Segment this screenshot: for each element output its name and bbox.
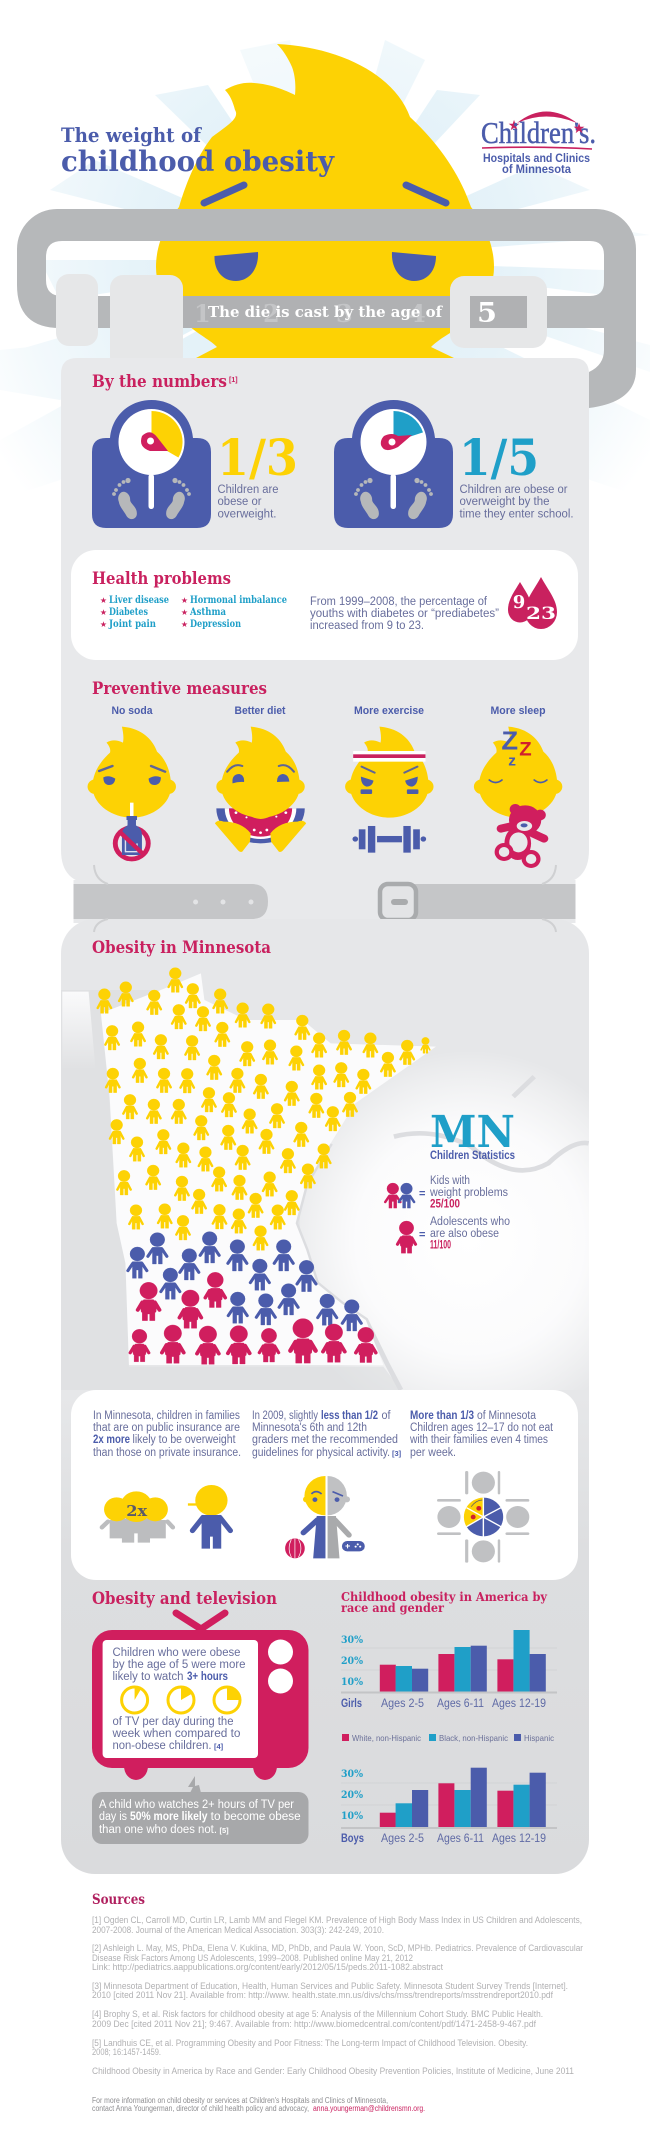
icon: dumbbell (352, 826, 426, 853)
fact 3: of Minnesota (477, 1410, 537, 1422)
face: more sleep (474, 726, 562, 818)
belt (17, 209, 636, 408)
panel: health problems (71, 550, 578, 660)
drops: 9 (513, 592, 525, 613)
icon: group of kids 2x: 2x (126, 1501, 148, 1520)
x labels: Ages 6-11 (437, 1833, 484, 1845)
state of Minnesota (101, 973, 436, 1365)
stat: weight problems (429, 1175, 508, 1210)
stat 1/5 caption: Children are obese or (460, 484, 568, 496)
x labels: Boys (341, 1833, 364, 1845)
heading: obesity in minnesota: Obesity in Minnesota (92, 938, 271, 958)
belt buckle (450, 276, 547, 348)
face: no soda (88, 727, 176, 861)
callout: 2+ hours: day is (99, 1811, 127, 1823)
icon: group of kids 2x (102, 1491, 173, 1543)
contact note: anna.youngerman@childrensmn.org. (313, 2104, 425, 2113)
chart legend (342, 1733, 555, 1743)
y labels: 20% (341, 1656, 363, 1667)
stat 1/5 caption: overweight by the (460, 496, 550, 508)
panel background (61, 919, 589, 1874)
map of Minnesota (61, 973, 590, 1390)
reference list: 2008; 16:1457-1459. (92, 2047, 161, 2058)
list of problems: Joint pain (108, 619, 157, 630)
belt around head (17, 209, 636, 408)
clocks (122, 1687, 240, 1713)
stat: obese adolescents: are also obese (430, 1228, 499, 1240)
tv text top: likely to watch (112, 1671, 184, 1683)
face: more sleep: Z (501, 726, 518, 755)
belt buckle (380, 884, 416, 920)
heading: sources: Sources (92, 1892, 145, 1908)
faded counting numbers: 1 (194, 299, 211, 328)
heading: race and gender: Childhood obesity in America by (341, 1590, 548, 1604)
list of problems: Hormonal imbalance (190, 595, 287, 606)
fact 3: with their families even 4 times (409, 1434, 548, 1446)
icon: kid with cap (188, 1485, 230, 1549)
reference list: [2] Ashleigh L. May, MS, PhDa, Elena V. Kuklina, MD, PhDb, and Paula W. Yoon, ScD, MPHb. Pediatrics. Prevalence of Cardiovascular (92, 1943, 584, 1954)
list of problems (108, 595, 287, 630)
stat 1/3: 1/3 (217, 428, 298, 487)
logo arc (517, 112, 577, 123)
faded counting numbers (194, 299, 426, 328)
title line 2: childhood obesity (61, 145, 335, 178)
title line 1: The weight of (61, 123, 202, 147)
health card (71, 550, 578, 660)
chart legend: Black, non-Hispanic (439, 1733, 509, 1743)
logo stars: ★ (508, 117, 520, 133)
logo line (482, 147, 592, 149)
stat 1/3 caption: obese or (218, 496, 262, 508)
logo (481, 112, 596, 176)
panel: Minnesota facts (71, 1390, 578, 1580)
reference list: [1] Ogden CL, Carroll MD, Curtin LR, Lamb MM and Flegel KM. Prevalence of High Body Mass Index in US Children and Adolescents, (92, 1915, 582, 1926)
list stars: ★ (100, 608, 107, 617)
west white land (62, 992, 93, 1046)
y labels: 30% (341, 1769, 363, 1780)
screen (103, 1640, 258, 1758)
drops (508, 577, 557, 629)
stat: obese adolescents (430, 1216, 510, 1252)
callout: 2+ hours: to become obese (211, 1811, 301, 1823)
equals: = (419, 1188, 425, 1200)
panel background (61, 358, 589, 884)
stat 1/5: 1/5 (459, 428, 539, 487)
list stars (100, 596, 188, 629)
tv text bottom (111, 1716, 240, 1752)
fact 1: In Minnesota, children in families (93, 1410, 240, 1422)
y labels: 10% (341, 1811, 363, 1822)
diabetes statement: increased from 9 to 23. (310, 620, 424, 632)
bars (380, 1630, 546, 1692)
fact 2 (252, 1410, 402, 1459)
bars (380, 1768, 546, 1827)
reference list: [5] Landhuis CE, et al. Programming Obesity and Poor Fitness: The Long-term Impact of Childhood Television. Obesity. (92, 2038, 528, 2049)
belt holes (193, 900, 254, 904)
facts card (71, 1390, 578, 1580)
fact 3: Children ages 12–17 do not eat (410, 1422, 554, 1434)
bar chart: boys (341, 1768, 557, 1845)
fact 2: less than 1/2 (321, 1410, 378, 1422)
x labels (341, 1833, 546, 1845)
MN statistics (385, 1107, 515, 1253)
x labels: Ages 12-19 (492, 1698, 546, 1710)
scale icon 1/5 (334, 400, 453, 528)
diabetes statement: From 1999–2008, the percentage of (310, 596, 488, 608)
tv text bottom: [4] (214, 1742, 224, 1751)
people on the map (98, 968, 430, 1364)
number window (470, 296, 527, 328)
stat: obese adolescents: 11/100 (430, 1240, 451, 1252)
faded counting numbers: 4 (409, 299, 426, 328)
face: more sleep: Z (519, 739, 532, 760)
list stars: ★ (181, 620, 188, 629)
lake and river (296, 1077, 589, 1390)
stat: weight problems: Kids with (430, 1175, 470, 1187)
fact 3: per week. (410, 1447, 456, 1459)
icon: teddy bear (495, 804, 546, 868)
fact 1: 2x more (93, 1434, 130, 1446)
blue children (128, 1232, 361, 1331)
callout: 2+ hours: 50% more likely (130, 1811, 208, 1823)
bar chart: girls (341, 1630, 557, 1710)
map glow (306, 1076, 589, 1390)
labels: preventive measures: More sleep (490, 705, 546, 717)
list stars: ★ (181, 608, 188, 617)
face: more sleep: z (508, 753, 516, 770)
chart legend: White, non-Hispanic (352, 1733, 422, 1743)
contact note: For more information on child obesity or services at Children's Hospitals and Clinics of Minnesota, (92, 2096, 388, 2105)
labels: preventive measures: More exercise (354, 705, 424, 717)
preventive faces (88, 726, 562, 868)
reference list: [3] Minnesota Department of Education, Health, Human Services and Public Safety. Minnesota Student Survey Trends [Internet]. (92, 1981, 568, 1992)
logo subline 2: of Minnesota (502, 162, 571, 176)
fact 1: than those on private insurance. (93, 1447, 241, 1459)
list of problems: Depression (190, 619, 242, 630)
icon: family table (437, 1471, 529, 1563)
panel fold lines (94, 865, 556, 932)
waist backing (74, 880, 576, 923)
fact 3 (409, 1410, 554, 1459)
fact 1 (93, 1410, 241, 1459)
logo subline 1: Hospitals and Clinics (483, 151, 590, 165)
stat 1/3 caption: Children are (218, 484, 278, 496)
tv text bottom: of TV per day during the (112, 1716, 234, 1728)
character head (156, 44, 494, 358)
chart legend: Hispanic (524, 1733, 555, 1743)
fact 2: guidelines for physical activity. (252, 1447, 390, 1459)
list stars: ★ (100, 620, 107, 629)
background rays (0, 40, 650, 500)
stat 1/3 caption: overweight. (218, 508, 276, 520)
heading: preventive measures: Preventive measures (92, 679, 267, 699)
fact 3: More than 1/3 (410, 1410, 474, 1422)
reference list: Disease Risk Factors Among US Adolescents, 1999–2008. Published online May 21, 2012 (92, 1953, 413, 1964)
heading: race and gender (341, 1590, 548, 1615)
belt strap right (400, 884, 576, 919)
waist belt (74, 880, 576, 923)
list of problems: Liver disease (109, 595, 169, 606)
x labels: Ages 2-5 (381, 1833, 424, 1845)
panel: lower body (61, 919, 590, 1874)
crimson children (130, 1272, 376, 1364)
y labels (341, 1635, 363, 1688)
x labels (341, 1698, 546, 1710)
tv text bottom: non-obese children. (112, 1740, 212, 1752)
equals: = (419, 1229, 425, 1241)
reference list: Link: http://pediatrics.aappublications.org/content/early/2012/05/15/peds.2011-1082.abstract (92, 1962, 443, 1973)
tv text top: by the age of 5 were more (112, 1659, 246, 1671)
face: better diet (215, 727, 306, 852)
callout: 2+ hours: A child who watches 2+ hours of TV per (99, 1799, 294, 1811)
stat: obese adolescents: Adolescents who (430, 1216, 510, 1228)
belt loop middle (110, 275, 183, 370)
stat 1/5 caption: time they enter school. (460, 508, 574, 520)
cabinet (92, 1630, 308, 1768)
reference list: 2010 [cited 2011 Nov 21]. Available from: http://www. health.state.mn.us/divs/chs/mss/trendreports/msstrendreport2010.pdf (92, 1990, 553, 2001)
labels: preventive measures (112, 705, 546, 717)
y labels: 30% (341, 1635, 363, 1646)
fact 2: of (382, 1410, 391, 1422)
reference list (92, 1915, 584, 2077)
diabetes statement (310, 596, 499, 632)
fact 1: that are on public insurance are (93, 1422, 240, 1434)
faded counting numbers: 2 (263, 299, 280, 328)
belt strip over head (183, 296, 450, 328)
faded counting numbers: 3 (336, 299, 353, 328)
list of problems: Diabetes (109, 607, 148, 618)
logo star right: ★ (573, 120, 585, 136)
callout: 2+ hours: [5] (220, 1826, 229, 1835)
tv text top: Children who were obese (112, 1647, 240, 1659)
knobs (268, 1640, 293, 1694)
reference list: 2009 Dec [cited 2011 Nov 21]; 9:467. Available from: http://www.biomedcentral.com/content/pdf/1471-2458-9-467.pdf (92, 2019, 536, 2030)
drops: 23 (526, 604, 556, 624)
yellow children (98, 968, 430, 1250)
icon: half active kid (285, 1476, 365, 1558)
y labels: 10% (341, 1677, 363, 1688)
scale icon 1/3 (92, 400, 211, 528)
neighbouring land (348, 1366, 398, 1390)
fact 1: likely to be overweight (132, 1434, 236, 1446)
icon: two kids (385, 1183, 414, 1208)
x labels: Ages 2-5 (381, 1698, 424, 1710)
stat 1/3 caption (218, 484, 278, 520)
labels: preventive measures: Better diet (234, 705, 286, 717)
reference list: Childhood Obesity in America by Race and Gender: Early Childhood Obesity Prevention Policies, Institute of Medicine, June 2011 (92, 2066, 574, 2077)
heading: obesity and television: Obesity and television (92, 1589, 277, 1609)
reference list: 2007-2008. Journal of the American Medical Association. 303(3): 242-249, 2010. (92, 1925, 384, 1936)
face: more exercise (345, 727, 434, 818)
diabetes statement: youths with diabetes or “prediabetes” (310, 608, 499, 620)
belt loop left (56, 274, 98, 346)
contact note: contact Anna Youngerman, director of child health policy and advocacy, (92, 2104, 309, 2113)
heading: by the numbers: By the numbers (92, 372, 227, 392)
footnote: [1] (229, 377, 238, 384)
belt strap left (74, 884, 268, 919)
tv text top: 3+ hours (187, 1671, 228, 1683)
logo wordmark: Children's. (481, 115, 596, 150)
fact 2: Minnesota's 6th and 12th (252, 1422, 367, 1434)
fact 2: graders met the recommended (252, 1434, 398, 1446)
fact 2: In 2009, slightly (252, 1410, 318, 1422)
heading: race and gender: race and gender (341, 1601, 445, 1615)
y labels: 20% (341, 1790, 363, 1801)
labels: preventive measures: No soda (112, 705, 153, 717)
tv text top (112, 1647, 246, 1683)
callout: 2+ hours: than one who does not. (99, 1824, 217, 1836)
heading: health problems: Health problems (92, 569, 231, 589)
panel: upper body (61, 358, 589, 884)
list stars: ★ (181, 596, 188, 605)
contact note (92, 2096, 425, 2113)
sources (92, 1892, 584, 2113)
y labels (341, 1769, 363, 1822)
TV (92, 1613, 308, 1780)
x labels: Girls (341, 1698, 362, 1710)
buckle tongue (391, 899, 408, 905)
antenna (176, 1613, 225, 1629)
lightning bolt (188, 1776, 201, 1793)
list of problems: Asthma (189, 607, 226, 618)
head shape (156, 44, 494, 358)
MN subheading: Children Statistics (430, 1148, 515, 1162)
x labels: Ages 6-11 (437, 1698, 484, 1710)
callout: 2+ hours (92, 1792, 308, 1844)
title (61, 123, 335, 178)
feet (124, 1766, 277, 1780)
icon: one kid (398, 1221, 415, 1253)
fact 2: [3] (392, 1449, 402, 1458)
tv text bottom: week when compared to (111, 1728, 240, 1740)
list stars: ★ (100, 596, 107, 605)
x labels: Ages 12-19 (492, 1833, 546, 1845)
stat 1/5 caption (460, 484, 574, 520)
head eyes (214, 252, 436, 281)
stat: weight problems: 25/100 (430, 1198, 460, 1210)
reference list: [4] Brophy S, et al. Risk factors for childhood obesity at age 5: Analysis of the Millennium Cohort Study. BMC Public Health. (92, 2009, 543, 2020)
belt text: The die is cast by the age of (208, 303, 444, 321)
head brows (204, 185, 446, 203)
MN heading: MN (430, 1107, 515, 1158)
number 5: 5 (477, 298, 497, 329)
stat: weight problems: weight problems (429, 1187, 508, 1199)
